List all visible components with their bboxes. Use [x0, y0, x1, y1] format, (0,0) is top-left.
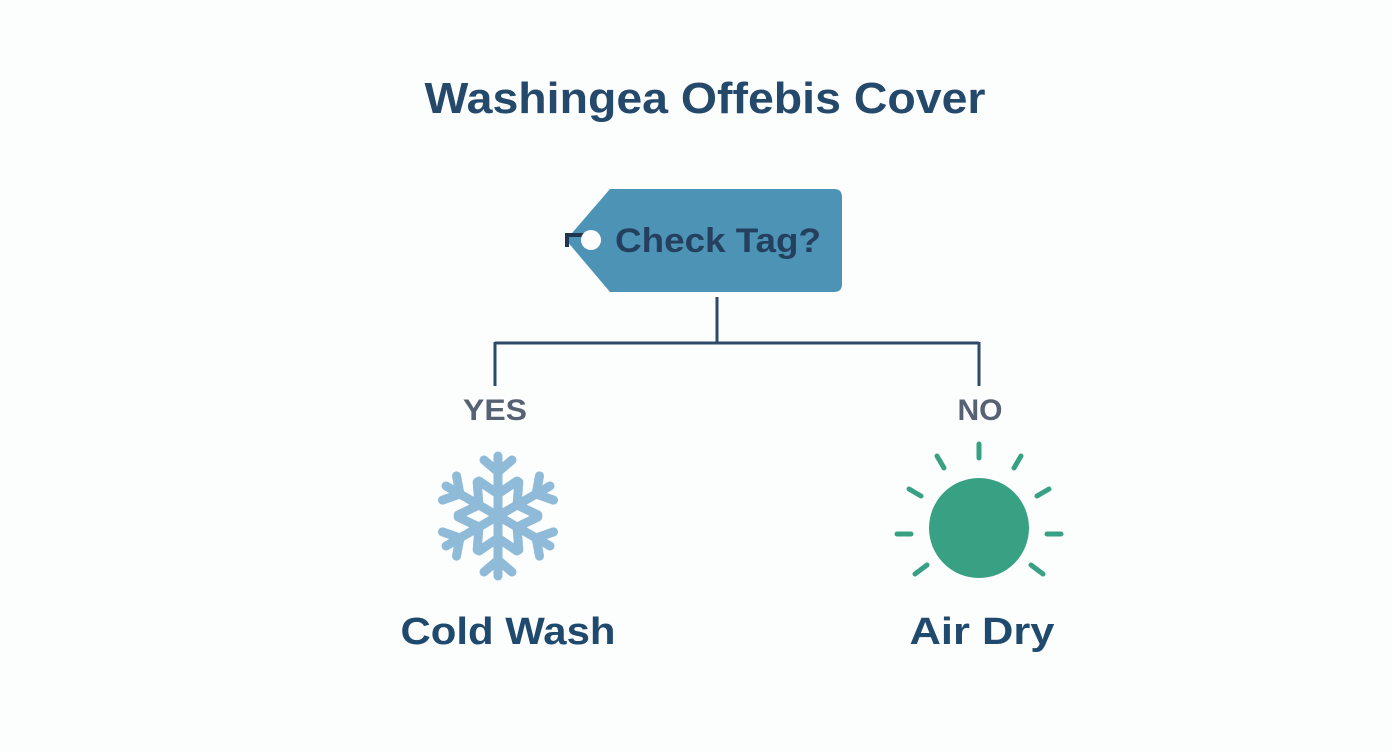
tag: Check Tag? [566, 189, 842, 292]
icon: snowflake [437, 456, 559, 576]
label: NO: NO [958, 394, 1002, 427]
flow connector lines [495, 297, 979, 386]
label: Air Dry: Air Dry [910, 611, 1054, 653]
title: Washingea Offebis Cover [424, 74, 986, 123]
label: YES: YES [463, 394, 527, 427]
label: Cold Wash: Cold Wash [400, 611, 616, 653]
tag: Check Tag?: Check Tag? [615, 222, 821, 260]
icon: sun [897, 444, 1061, 578]
